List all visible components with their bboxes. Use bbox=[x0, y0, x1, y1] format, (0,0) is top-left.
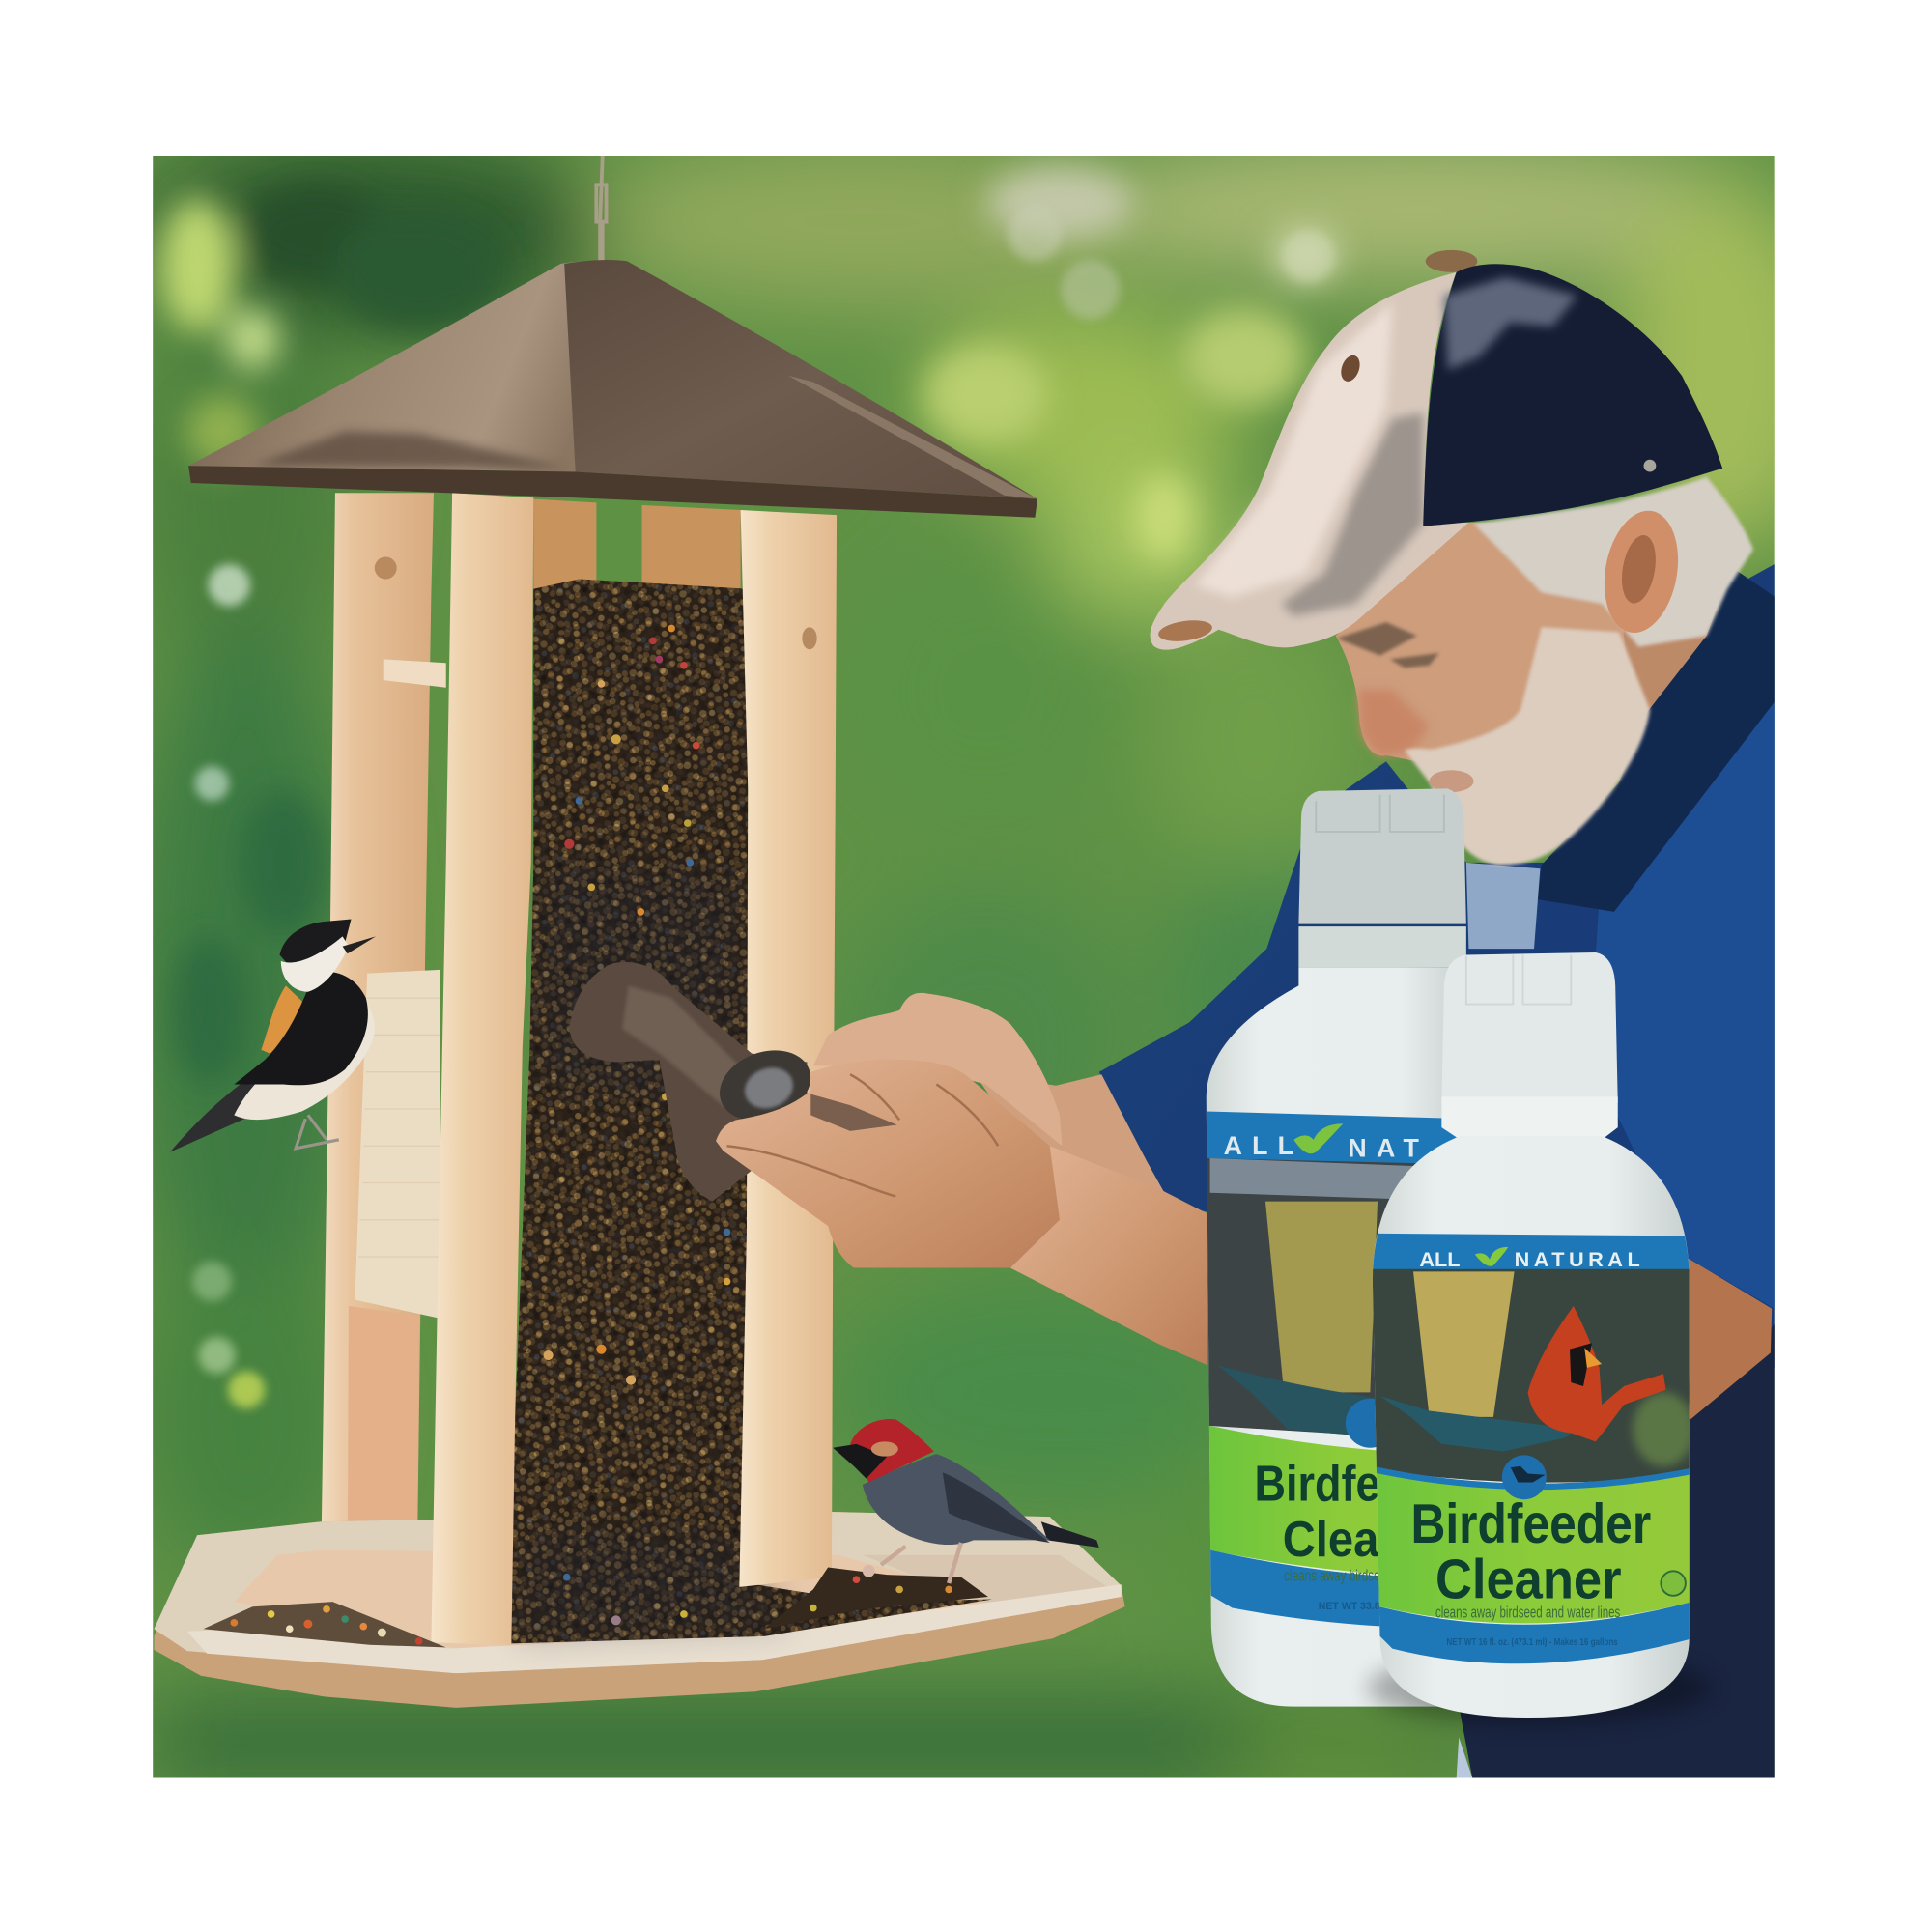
roof fascia bbox=[188, 466, 1037, 518]
inner back posts bbox=[533, 499, 741, 591]
back label: cleans away birdse bbox=[1284, 1566, 1380, 1584]
front hand bbox=[716, 1060, 1060, 1267]
shirt check at neck bbox=[1466, 863, 1540, 949]
thumb grip behind bbox=[810, 1093, 895, 1131]
red head bbox=[850, 1419, 934, 1482]
shirt hem light bbox=[1457, 1737, 1472, 1778]
title: Birdfeeder bbox=[1410, 1493, 1651, 1555]
back label: NAT bbox=[1348, 1134, 1429, 1163]
bird body bbox=[863, 1454, 1050, 1545]
mouth bbox=[1430, 770, 1474, 792]
seed texture layer bbox=[505, 579, 992, 1644]
right forearm bbox=[1686, 1257, 1772, 1419]
photo glow bbox=[1633, 1392, 1694, 1466]
bird wing bbox=[943, 1472, 1050, 1543]
grommet bbox=[1338, 353, 1363, 384]
cap button bbox=[1426, 250, 1477, 272]
tube end opening bbox=[710, 1038, 820, 1133]
front bottle cap bbox=[1441, 952, 1618, 1103]
cap brim highlight bbox=[1195, 301, 1392, 598]
back bottle neck bbox=[1298, 926, 1466, 967]
black throat bbox=[833, 1444, 887, 1479]
bird badge bbox=[1502, 1455, 1547, 1499]
black and orange bird bbox=[170, 920, 376, 1152]
bird feeder bbox=[154, 156, 1125, 1708]
rolled sleeve highlight bbox=[1589, 702, 1775, 1309]
net weight: NET WT 16 fl. oz. (473.1 ml) - Makes 16 gallons bbox=[1446, 1637, 1618, 1648]
front label: NATURAL bbox=[1515, 1247, 1640, 1271]
blurred garden background bbox=[135, 135, 1836, 1786]
back label: NET WT 33.8 bbox=[1319, 1601, 1380, 1612]
roof right face bbox=[564, 260, 1037, 499]
orange chest bbox=[261, 985, 318, 1062]
brow and eye bbox=[1337, 622, 1439, 668]
tray top bbox=[154, 1512, 1122, 1673]
label photo bbox=[1370, 1269, 1691, 1483]
back bottle bbox=[1207, 788, 1466, 1707]
cap beige panel bbox=[1151, 272, 1468, 650]
ear bbox=[1595, 505, 1687, 639]
hands and arms bbox=[716, 993, 1208, 1365]
tagline: cleans away birdseed and water lines bbox=[1435, 1604, 1620, 1622]
back hand bbox=[813, 993, 1062, 1146]
back green band bbox=[1208, 1426, 1466, 1577]
label blue bottom bbox=[1370, 1602, 1691, 1663]
back bottle cap ribs bbox=[1316, 795, 1444, 832]
legs bbox=[881, 1543, 961, 1583]
roof left face bbox=[188, 261, 627, 472]
beak bbox=[343, 936, 376, 953]
bird tail bbox=[1041, 1521, 1099, 1548]
seed column bbox=[505, 579, 992, 1644]
front label bbox=[1370, 1234, 1694, 1663]
shirt bbox=[1099, 564, 1775, 1403]
tray rim bbox=[187, 1584, 1122, 1673]
feeding tube scoop bbox=[569, 962, 820, 1202]
label green band bbox=[1370, 1468, 1691, 1624]
front bottle body bbox=[1373, 1136, 1690, 1718]
beard bbox=[1405, 627, 1650, 865]
left seed heap bbox=[203, 1602, 446, 1647]
roof tip shadow bbox=[252, 431, 567, 469]
back post lower shade bbox=[348, 1306, 419, 1614]
peg bbox=[384, 659, 446, 688]
back dish bbox=[1217, 1365, 1380, 1435]
dish bbox=[1380, 1396, 1577, 1452]
front bottle neck bbox=[1441, 1096, 1618, 1140]
brim underside bbox=[1157, 617, 1213, 644]
colourful seeds bbox=[543, 625, 730, 1625]
back label: Birdfe bbox=[1254, 1457, 1380, 1513]
tail bbox=[170, 1084, 277, 1152]
front bottle bbox=[1368, 952, 1713, 1725]
collar bbox=[1538, 567, 1775, 912]
cap bbox=[1151, 250, 1722, 650]
slat box bbox=[355, 970, 440, 1319]
leaf logo bbox=[1475, 1247, 1508, 1266]
roof right sliver bbox=[788, 376, 1037, 499]
head bbox=[280, 920, 352, 974]
tube end glint bbox=[739, 1061, 799, 1115]
tray body bbox=[154, 1512, 1125, 1708]
back seed cone bbox=[1265, 1202, 1378, 1392]
right seed pile bbox=[764, 1565, 988, 1629]
darker seed band bbox=[518, 863, 788, 1638]
right post bbox=[739, 510, 837, 1587]
cap navy panel bbox=[1423, 264, 1722, 526]
slat lines bbox=[358, 998, 440, 1257]
nose shading bbox=[1358, 690, 1430, 756]
roof bbox=[188, 260, 1037, 518]
belly bbox=[234, 1005, 375, 1120]
hair bbox=[1474, 477, 1753, 647]
back label bbox=[1207, 1112, 1466, 1629]
cap shadow bbox=[1282, 412, 1423, 616]
cap light patch bbox=[1444, 277, 1577, 370]
tray inner back bbox=[863, 1555, 1115, 1605]
tube body bbox=[569, 962, 807, 1202]
bottle shadow bbox=[1368, 1651, 1713, 1725]
finger creases bbox=[727, 1074, 998, 1197]
grip fingers bbox=[810, 1094, 897, 1131]
front post bbox=[431, 493, 533, 1645]
white cheek bbox=[281, 936, 349, 992]
back arm bbox=[974, 1072, 1164, 1220]
hanging hook bbox=[596, 156, 607, 261]
all natural text: ALL bbox=[1419, 1247, 1460, 1271]
black body bbox=[234, 972, 368, 1085]
back leaf logo bbox=[1293, 1123, 1343, 1153]
front label: Cleaner bbox=[1435, 1548, 1622, 1610]
knot bbox=[375, 557, 397, 579]
label blue top bbox=[1370, 1234, 1691, 1271]
post knot bbox=[802, 627, 817, 649]
seed cone bbox=[1413, 1271, 1515, 1417]
back label text: ALL bbox=[1224, 1131, 1303, 1160]
neck bbox=[1623, 601, 1719, 712]
tray inner bbox=[234, 1550, 1010, 1649]
back label: Clea bbox=[1283, 1512, 1379, 1568]
tube highlight bbox=[622, 985, 739, 1109]
red headed bird bbox=[833, 1419, 1099, 1583]
seal bbox=[1661, 1571, 1686, 1596]
back bottle body bbox=[1207, 967, 1466, 1707]
face bbox=[1335, 522, 1625, 761]
back bottle cap bbox=[1298, 788, 1466, 924]
front arm bbox=[1010, 1146, 1208, 1365]
cardinal bbox=[1528, 1306, 1665, 1441]
photo panel bbox=[135, 135, 1836, 1786]
feet bbox=[296, 1115, 339, 1149]
back badge bbox=[1346, 1399, 1395, 1448]
lower torso bbox=[1460, 1324, 1775, 1778]
cap ribs bbox=[1466, 955, 1571, 1005]
back left post bbox=[321, 493, 434, 1614]
man bbox=[1099, 250, 1775, 1778]
eye patch bbox=[871, 1441, 898, 1457]
